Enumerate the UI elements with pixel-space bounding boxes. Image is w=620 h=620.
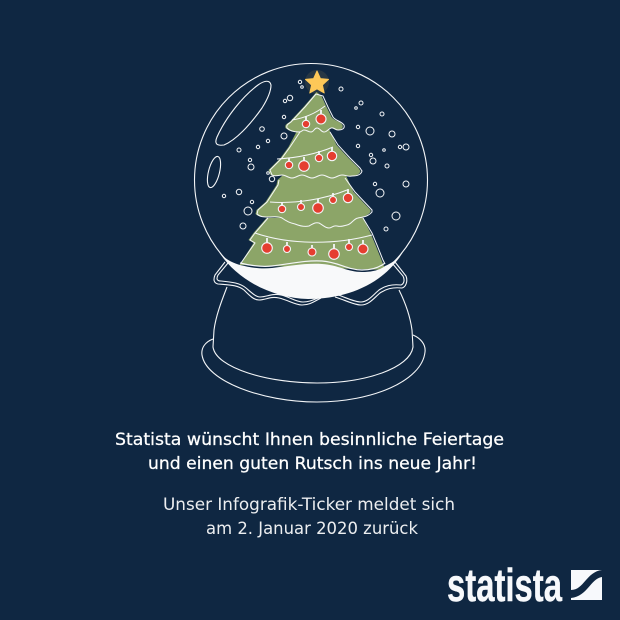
logo icon [571,570,602,600]
logo wordmark: statista [447,559,562,611]
return notice text: Unser Infografik-Ticker meldet sich [163,495,455,515]
globe base [202,262,425,402]
glass highlights [205,81,271,189]
bauble hooks [267,110,363,249]
return notice text [163,495,455,539]
globe glass outline [194,64,428,296]
statista logo [447,559,602,611]
garlands [292,106,325,120]
snowflakes [222,80,409,231]
star [305,70,329,94]
tree foliage [240,92,386,270]
snow globe illustration [194,64,428,402]
tree outline and tiers [240,94,385,270]
baubles [262,114,368,259]
greeting text: und einen guten Rutsch ins neue Jahr! [148,454,477,474]
greeting text [115,430,504,474]
snow mound [219,252,403,299]
snow line [240,261,385,270]
return notice text: am 2. Januar 2020 zurück [206,519,418,539]
tree [240,70,386,270]
greeting text: Statista wünscht Ihnen besinnliche Feiertage [115,430,504,450]
